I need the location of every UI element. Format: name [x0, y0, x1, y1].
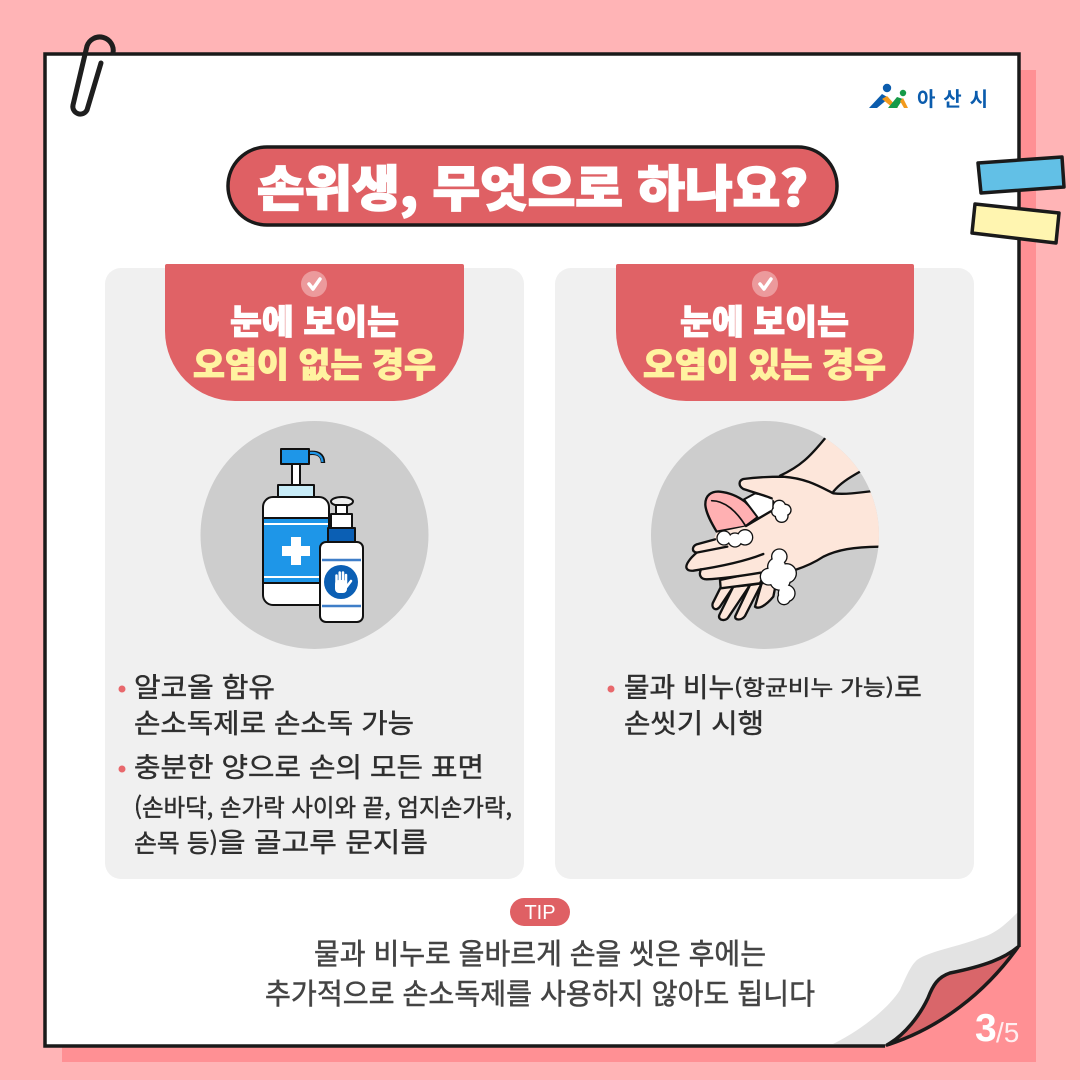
- icon: sanitizer bottles: [200, 421, 428, 649]
- text: bullet: 물과 비누: [624, 666, 734, 705]
- panel: visible contamination: [555, 264, 974, 879]
- page number: 3: [975, 1007, 997, 1050]
- panel: no visible contamination: [105, 264, 524, 879]
- text: bullets: 충분한 양으로 손의 모든 표면: [134, 746, 484, 785]
- lower fingers: [712, 587, 733, 609]
- logo: Asan City: [869, 83, 988, 112]
- paper clip: [73, 37, 113, 114]
- tab header: 눈에 보이는: [680, 295, 849, 344]
- tip badge: TIP: [524, 902, 556, 924]
- text: bullets: [118, 666, 512, 860]
- tab header: [165, 264, 464, 401]
- title pill: 손위생, 무엇으로 하나요?: [257, 150, 808, 221]
- page number: [975, 1007, 1019, 1050]
- text: bullets: (손바닥, 손가락 사이와 끝, 엄지손가락,: [134, 788, 512, 823]
- finger behind foam: [744, 493, 773, 518]
- page curl flap: [887, 947, 1018, 1045]
- main hand: [686, 477, 882, 579]
- tab header: 오염이 있는 경우: [643, 338, 886, 387]
- tip text: 물과 비누로 올바르게 손을 씻은 후에는: [314, 931, 766, 973]
- text: bullet: 로: [894, 666, 922, 705]
- tip badge: [510, 898, 570, 926]
- curl shadow: [833, 912, 1018, 1046]
- text: bullets: 을 골고루 문지름: [218, 821, 428, 860]
- tab header: [616, 264, 914, 401]
- text: bullet: 손씻기 시행: [624, 702, 764, 741]
- text: bullets: 알코올 함유: [134, 666, 275, 705]
- text: bullets: 손목 등): [134, 824, 218, 860]
- page number: /5: [996, 1017, 1019, 1048]
- sticky tabs: [972, 157, 1064, 243]
- soap bar: [705, 492, 758, 532]
- foam: [716, 500, 797, 605]
- text: bullets: 손소독제로 손소독 가능: [134, 702, 414, 741]
- icon: hands washing: [651, 421, 893, 649]
- tab header: 눈에 보이는: [230, 295, 399, 344]
- logo: Asan City: 아산시: [917, 83, 988, 112]
- tab header: 오염이 없는 경우: [193, 338, 436, 387]
- far arm: [783, 439, 859, 492]
- text: bullet: [608, 666, 922, 741]
- tip text: 추가적으로 손소독제를 사용하지 않아도 됩니다: [265, 971, 815, 1013]
- tip text: [265, 931, 815, 1013]
- text: bullet: (항균비누 가능): [734, 672, 894, 702]
